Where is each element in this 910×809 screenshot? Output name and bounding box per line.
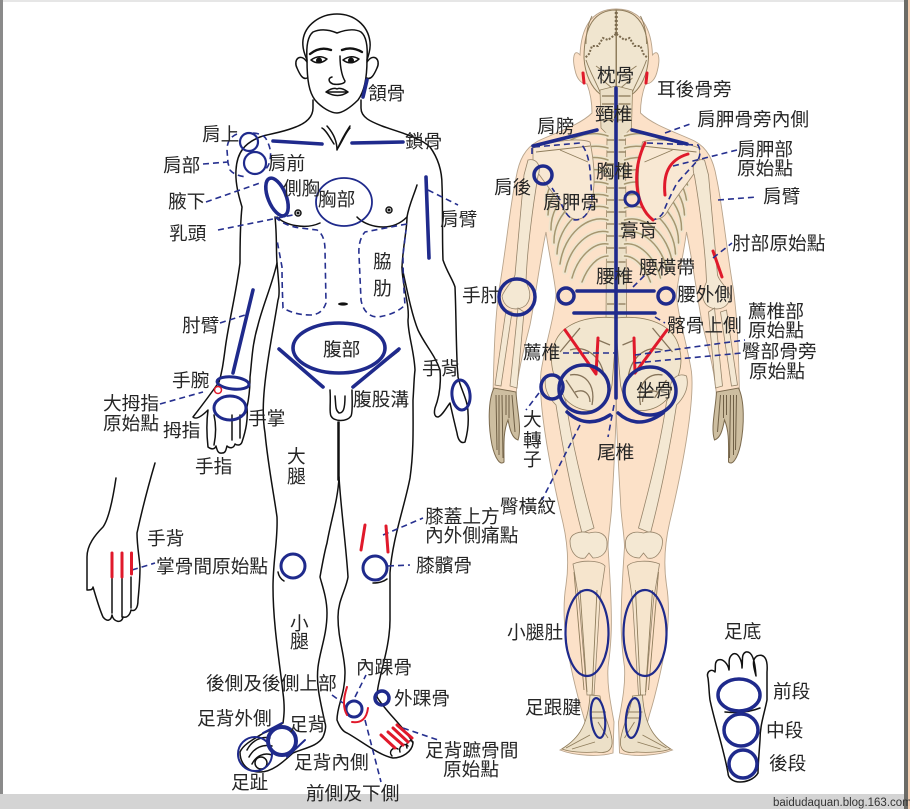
back figure: red marks	[565, 73, 722, 374]
lower leg bones half	[573, 561, 605, 695]
skull half	[584, 10, 616, 96]
foot sole: outline and sections	[708, 652, 767, 782]
label: 原始點	[749, 361, 805, 382]
label: 肩部	[163, 155, 200, 176]
hand bones half	[489, 388, 520, 463]
femur half	[545, 375, 594, 533]
back figure: circles	[499, 166, 676, 422]
label: 腋下	[168, 191, 205, 212]
label: 足跟腱	[525, 697, 581, 718]
label: 足趾	[231, 772, 268, 793]
label: 乳頭	[169, 223, 207, 244]
label: 胸部	[318, 189, 355, 210]
label: 肩臂	[763, 186, 800, 207]
label: 前側及下側	[306, 783, 399, 804]
label: 肩膀	[537, 116, 574, 137]
labels: front figure	[103, 83, 518, 793]
label: 大	[287, 446, 306, 467]
label: 手背	[147, 528, 184, 549]
label: 足背蹠骨間	[425, 740, 518, 761]
foot sole: zones	[718, 679, 760, 778]
label: 大拇指	[103, 393, 159, 414]
label: 肩臂	[440, 209, 477, 230]
label: 轉	[523, 430, 542, 451]
label: 腹股溝	[353, 389, 409, 410]
label: 尾椎	[597, 442, 634, 463]
label: 肘部原始點	[732, 233, 825, 254]
watermark: baidudaquan.blog.163.com	[773, 797, 910, 809]
label: 側胸	[283, 178, 320, 199]
front figure: red marks	[214, 386, 412, 748]
label: 足背外側	[197, 708, 272, 729]
label: 肩前	[268, 153, 305, 174]
hand detail: outline	[87, 463, 155, 621]
knee condyles half	[570, 532, 607, 558]
back figure: shoulder lines	[533, 130, 687, 146]
back figure: skin and skeleton	[489, 9, 743, 755]
back figure: calf and heel ellipses	[566, 590, 666, 739]
forearm bones half	[495, 308, 524, 388]
back figure: right half mirrored	[616, 9, 743, 755]
label: 肘臂	[182, 315, 219, 336]
footer bar with watermark	[0, 783, 910, 809]
label: 膝蓋上方	[425, 506, 500, 527]
ribs lines half	[545, 134, 608, 282]
neck and spine half	[600, 86, 616, 322]
label: 足底	[724, 621, 761, 642]
label: 肩胛部	[737, 139, 793, 160]
label: 腰外側	[677, 284, 733, 305]
ribs base half	[545, 134, 608, 282]
label: 大	[523, 409, 542, 430]
label: 小腿肚	[507, 622, 563, 643]
back figure: scapula dashes	[532, 143, 700, 220]
label: 手掌	[248, 408, 285, 429]
label: 耳後骨旁	[657, 79, 732, 100]
label: 足背	[289, 714, 326, 735]
label: 中段	[766, 720, 803, 741]
label: 外踝骨	[394, 688, 450, 709]
label: 膝髕骨	[416, 555, 472, 576]
front figure: face	[295, 48, 392, 306]
label: 拇指	[163, 420, 200, 441]
label: 腰橫帶	[639, 257, 695, 278]
label: 手腕	[172, 370, 209, 391]
label: 後段	[769, 753, 806, 774]
label: 手指	[195, 456, 232, 477]
front figure: dashed zones	[132, 133, 458, 782]
front figure: body outline	[193, 14, 468, 772]
back figure: spine line	[614, 88, 618, 398]
label: 前段	[773, 681, 810, 702]
label: 肩胛骨旁內側	[697, 109, 809, 130]
label: 肩上	[202, 124, 239, 145]
label: 坐骨	[636, 380, 673, 401]
label: 肋	[373, 278, 392, 299]
label: 胸椎	[596, 161, 633, 182]
label: 頷骨	[368, 83, 405, 104]
label: 掌骨間原始點	[156, 556, 268, 577]
label: 內踝骨	[356, 657, 412, 678]
label: 腿	[290, 631, 309, 652]
label: 原始點	[443, 759, 499, 780]
label: 手背	[422, 358, 459, 379]
label: 肩胛骨	[543, 192, 599, 213]
pelvis half	[552, 317, 616, 410]
label: 膏肓	[620, 220, 657, 241]
labels: back figure	[462, 65, 825, 774]
label: 原始點	[737, 158, 793, 179]
back figure: left half	[489, 9, 616, 755]
label: 脇	[373, 251, 392, 272]
back figure: leader lines	[526, 124, 757, 500]
label: 頸椎	[595, 104, 632, 125]
upper arm bone half	[502, 160, 539, 309]
label: 後側及後側上部	[206, 673, 337, 694]
hand detail: red metacarpal marks	[112, 553, 132, 577]
label: 髂骨上側	[667, 315, 742, 336]
label: 薦椎	[523, 342, 560, 363]
label: 原始點	[103, 413, 159, 434]
label: 腰椎	[596, 266, 633, 287]
front figure: navy marks	[214, 80, 472, 771]
scapula half	[533, 140, 594, 219]
label: 腿	[287, 466, 306, 487]
label: 原始點	[748, 320, 804, 341]
label: 小	[290, 613, 309, 634]
label: 足背內側	[294, 752, 369, 773]
label: 內外側痛點	[425, 525, 518, 546]
foot half	[562, 695, 612, 752]
label: 手肘	[462, 285, 499, 306]
label: 鎖骨	[405, 131, 442, 152]
back figure: transverse lumbar lines	[574, 291, 655, 313]
label: 枕骨	[597, 65, 634, 86]
label: 腹部	[323, 339, 360, 360]
label: 臀橫紋	[500, 496, 556, 517]
front figure: feet toes	[214, 415, 413, 769]
label: 肩後	[494, 177, 531, 198]
label: 臀部骨旁	[742, 341, 817, 362]
label: 薦椎部	[748, 301, 804, 322]
label: 子	[523, 449, 542, 470]
